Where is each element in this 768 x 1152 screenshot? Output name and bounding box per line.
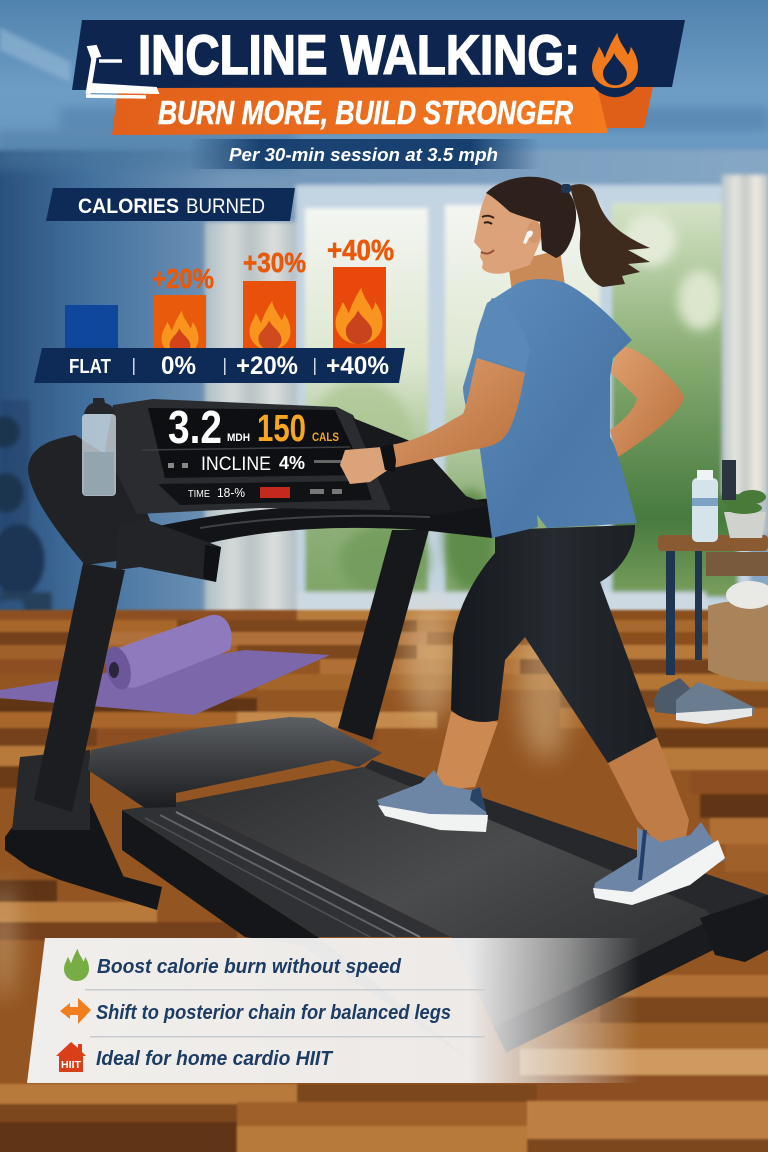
front calf — [436, 712, 498, 790]
console readouts: TIME — [188, 489, 210, 500]
orange banner dark tail — [590, 87, 653, 128]
benefits panel — [27, 938, 640, 1083]
benefit 3 — [56, 1042, 334, 1072]
axis label band — [34, 348, 405, 383]
axis label band: +20% — [236, 352, 298, 380]
axis label band: FLAT — [69, 356, 111, 378]
sleeve — [473, 298, 530, 373]
side rail far — [360, 760, 768, 925]
neck — [508, 250, 565, 292]
console readouts: 4% — [279, 453, 305, 473]
leggings — [451, 525, 657, 763]
bar: +20% — [152, 263, 214, 355]
running belt — [179, 767, 722, 1040]
bar: +30% — [243, 247, 306, 350]
chart heading — [46, 188, 295, 221]
handle rail — [116, 498, 492, 582]
chart heading: BURNED — [186, 195, 265, 218]
console readouts: 150 — [257, 408, 306, 450]
base and foot — [5, 750, 162, 910]
title banner — [72, 20, 685, 135]
front roller — [500, 895, 768, 1040]
benefit 1 — [64, 949, 402, 981]
ponytail — [570, 184, 650, 287]
motor cover — [88, 717, 382, 808]
subtitle: BURN MORE, BUILD STRONGER — [158, 94, 573, 131]
window — [296, 185, 750, 625]
side table with bottle, plant, basket and spare shoes — [654, 460, 768, 724]
curtains — [205, 175, 768, 618]
console readouts: CALS — [312, 430, 339, 444]
axis label band: 0% — [161, 352, 196, 380]
title: INCLINE WALKING: — [138, 23, 580, 86]
bar chart: calories burned — [34, 188, 405, 383]
hair — [486, 177, 576, 258]
session note — [190, 139, 540, 169]
front shoe — [377, 770, 488, 832]
console body — [105, 399, 490, 515]
background: wood floor — [0, 610, 768, 1152]
session note: Per 30-min session at 3.5 mph — [229, 145, 498, 165]
axis label band: +40% — [326, 352, 389, 380]
gym equipment on the left — [0, 400, 52, 650]
console readouts: MDH — [227, 432, 250, 444]
rear upright — [338, 530, 429, 740]
benefit 1: Boost calorie burn without speed — [97, 956, 402, 978]
chart heading: CALORIES — [78, 195, 179, 218]
ear — [527, 221, 541, 243]
far arm — [610, 345, 684, 457]
rear calf — [608, 737, 689, 843]
bar: +20%: +20% — [152, 263, 214, 294]
bar: +40% — [327, 235, 394, 350]
water bottle — [82, 398, 116, 496]
icon: flame — [588, 33, 642, 97]
earbud — [523, 230, 533, 244]
navy banner — [72, 20, 685, 90]
hand — [340, 447, 388, 484]
benefit 3: Ideal for home cardio HIIT — [96, 1048, 334, 1070]
woman walking — [340, 177, 725, 905]
bar: +30%: +30% — [243, 247, 306, 278]
deck lower body — [122, 810, 470, 1060]
smartwatch — [380, 444, 396, 472]
benefit 3: HIIT — [61, 1060, 81, 1071]
rear shoe — [593, 822, 725, 905]
background: room — [0, 0, 768, 650]
treadmill — [5, 398, 768, 1060]
bar: +40%: +40% — [327, 235, 394, 267]
left wing of console — [28, 435, 150, 565]
near arm — [390, 358, 525, 468]
floor reflections — [0, 600, 571, 1000]
orange banner front — [112, 87, 608, 135]
front upright — [34, 563, 125, 812]
bar: flat — [65, 305, 118, 350]
console readouts — [168, 401, 342, 500]
console readouts: 3.2 — [168, 401, 222, 453]
yoga mat — [0, 615, 330, 715]
benefit 2: Shift to posterior chain for balanced legs — [96, 1002, 451, 1024]
facial features — [481, 216, 494, 254]
face — [474, 193, 545, 274]
console readouts: INCLINE — [201, 454, 271, 475]
icon: treadmill — [86, 46, 158, 97]
side rail near — [122, 802, 451, 937]
console readouts: 18-% — [217, 485, 245, 500]
shirt — [463, 279, 637, 538]
